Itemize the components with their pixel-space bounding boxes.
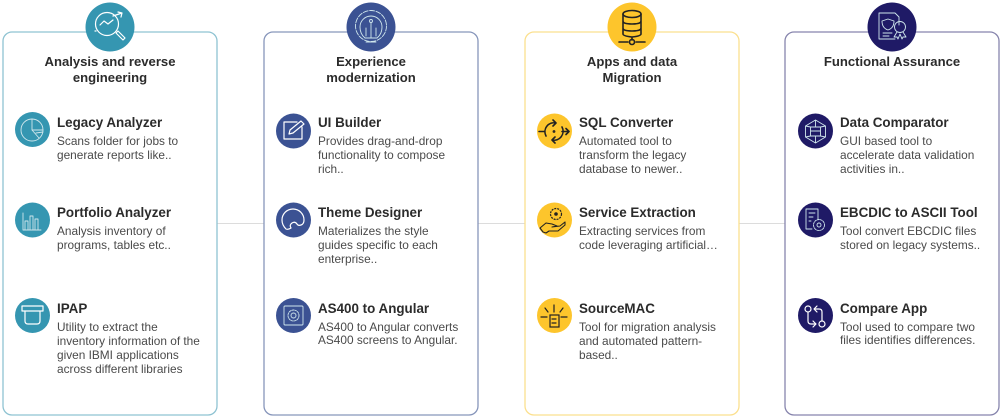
item: Data Comparator: Data Comparator	[840, 115, 949, 130]
icon: magnifier with chart	[86, 2, 134, 52]
item: SQL Converter: transform the legacy	[579, 148, 686, 162]
item: Portfolio Analyzer: Portfolio Analyzer	[57, 205, 172, 220]
item: IPAP: IPAP	[57, 301, 87, 316]
item: EBCDIC to ASCII Tool	[798, 202, 980, 252]
item: EBCDIC to ASCII Tool: EBCDIC to ASCII Tool	[840, 205, 978, 220]
item: SQL Converter: SQL Converter	[579, 115, 674, 130]
item: Portfolio Analyzer: programs, tables etc..	[57, 238, 171, 252]
heading: engineering	[73, 70, 147, 85]
panel border	[264, 32, 478, 415]
item: Theme Designer: guides specific to each	[318, 238, 438, 252]
item: AS400 to Angular: AS400 screens to Angular.	[318, 333, 458, 347]
item: SQL Converter	[537, 114, 686, 176]
icon: database	[608, 2, 656, 52]
item: Data Comparator: GUI based tool to	[840, 134, 933, 148]
item: AS400 to Angular: AS400 to Angular	[318, 301, 430, 316]
item: AS400 to Angular: AS400 to Angular converts	[318, 320, 458, 334]
item: Data Comparator	[798, 114, 974, 176]
item: UI Builder	[276, 114, 445, 176]
item: IPAP: inventory information of the	[57, 334, 200, 348]
panel: analysis and reverse engineering	[3, 2, 217, 415]
item: Legacy Analyzer: Scans folder for jobs to	[57, 134, 179, 148]
item: UI Builder: Provides drag-and-drop	[318, 134, 443, 148]
item: Theme Designer	[276, 202, 438, 266]
item: Data Comparator: activities in..	[840, 162, 905, 176]
item: Theme Designer: Materializes the style	[318, 224, 429, 238]
item: Legacy Analyzer: generate reports like..	[57, 148, 172, 162]
item: Service Extraction: Extracting services from	[579, 224, 706, 238]
item: SourceMAC	[537, 298, 716, 362]
item: Theme Designer: Theme Designer	[318, 205, 423, 220]
item: Compare App: Compare App	[840, 301, 927, 316]
item: EBCDIC to ASCII Tool: Tool convert EBCDIC files	[840, 224, 976, 238]
item: SourceMAC: and automated pattern-	[579, 334, 702, 348]
icon: hand with gear	[537, 202, 572, 238]
icon: bar chart	[15, 202, 50, 238]
item: Service Extraction: code leveraging artificial…	[579, 238, 718, 252]
icon: pie chart	[15, 112, 50, 147]
item: IPAP: Utility to extract the	[57, 320, 158, 334]
heading: Migration	[603, 70, 661, 85]
item: IPAP: across different libraries	[57, 362, 183, 376]
icon: compare arrows	[798, 298, 833, 333]
item: UI Builder: functionality to compose	[318, 148, 445, 162]
icon: box	[15, 298, 50, 333]
heading: modernization	[326, 70, 416, 85]
icon: converter	[537, 114, 572, 148]
heading: Analysis and reverse	[44, 54, 176, 69]
panel: functional assurance	[785, 2, 999, 415]
item: Compare App	[798, 298, 975, 347]
item: UI Builder: UI Builder	[318, 115, 382, 130]
item: Legacy Analyzer: Legacy Analyzer	[57, 115, 163, 130]
item: IPAP	[15, 298, 200, 376]
item: Compare App: Tool used to compare two	[840, 320, 975, 334]
item: Portfolio Analyzer: Analysis inventory of	[57, 224, 166, 238]
item: SourceMAC: SourceMAC	[579, 301, 655, 316]
panel border	[785, 32, 999, 415]
item: SourceMAC: Tool for migration analysis	[579, 320, 716, 334]
item: SQL Converter: database to newer..	[579, 162, 682, 176]
item: Portfolio Analyzer	[15, 202, 172, 252]
panel: experience modernization	[264, 2, 478, 415]
item: AS400 to Angular	[276, 298, 458, 347]
item: EBCDIC to ASCII Tool: stored on legacy systems..	[840, 238, 980, 252]
item: Data Comparator: accelerate data validation	[840, 148, 974, 162]
panel border	[525, 32, 739, 415]
item: Theme Designer: enterprise..	[318, 252, 377, 266]
item: UI Builder: rich..	[318, 162, 344, 176]
item: Compare App: files identifies differences.	[840, 333, 975, 347]
item: IPAP: given IBMI applications	[57, 348, 179, 362]
item: SQL Converter: Automated tool to	[579, 134, 672, 148]
panel border	[3, 32, 217, 415]
panel: apps and data migration	[525, 2, 739, 415]
icon: gear in frame	[276, 298, 311, 333]
icon: document with arrows	[537, 298, 572, 333]
icon: certificate	[868, 2, 916, 52]
item: Legacy Analyzer	[15, 112, 179, 162]
heading: Experience	[336, 54, 406, 69]
heading: Functional Assurance	[824, 54, 960, 69]
item: SourceMAC: based..	[579, 348, 618, 362]
item: Service Extraction: Service Extraction	[579, 205, 696, 220]
icon: lightbulb with gear	[346, 2, 396, 52]
icon: palette	[276, 202, 311, 238]
icon: edit	[276, 114, 311, 148]
item: Service Extraction	[537, 202, 718, 252]
icon: network cube	[798, 114, 833, 148]
icon: document with gear	[798, 202, 833, 238]
heading: Apps and data	[587, 54, 678, 69]
